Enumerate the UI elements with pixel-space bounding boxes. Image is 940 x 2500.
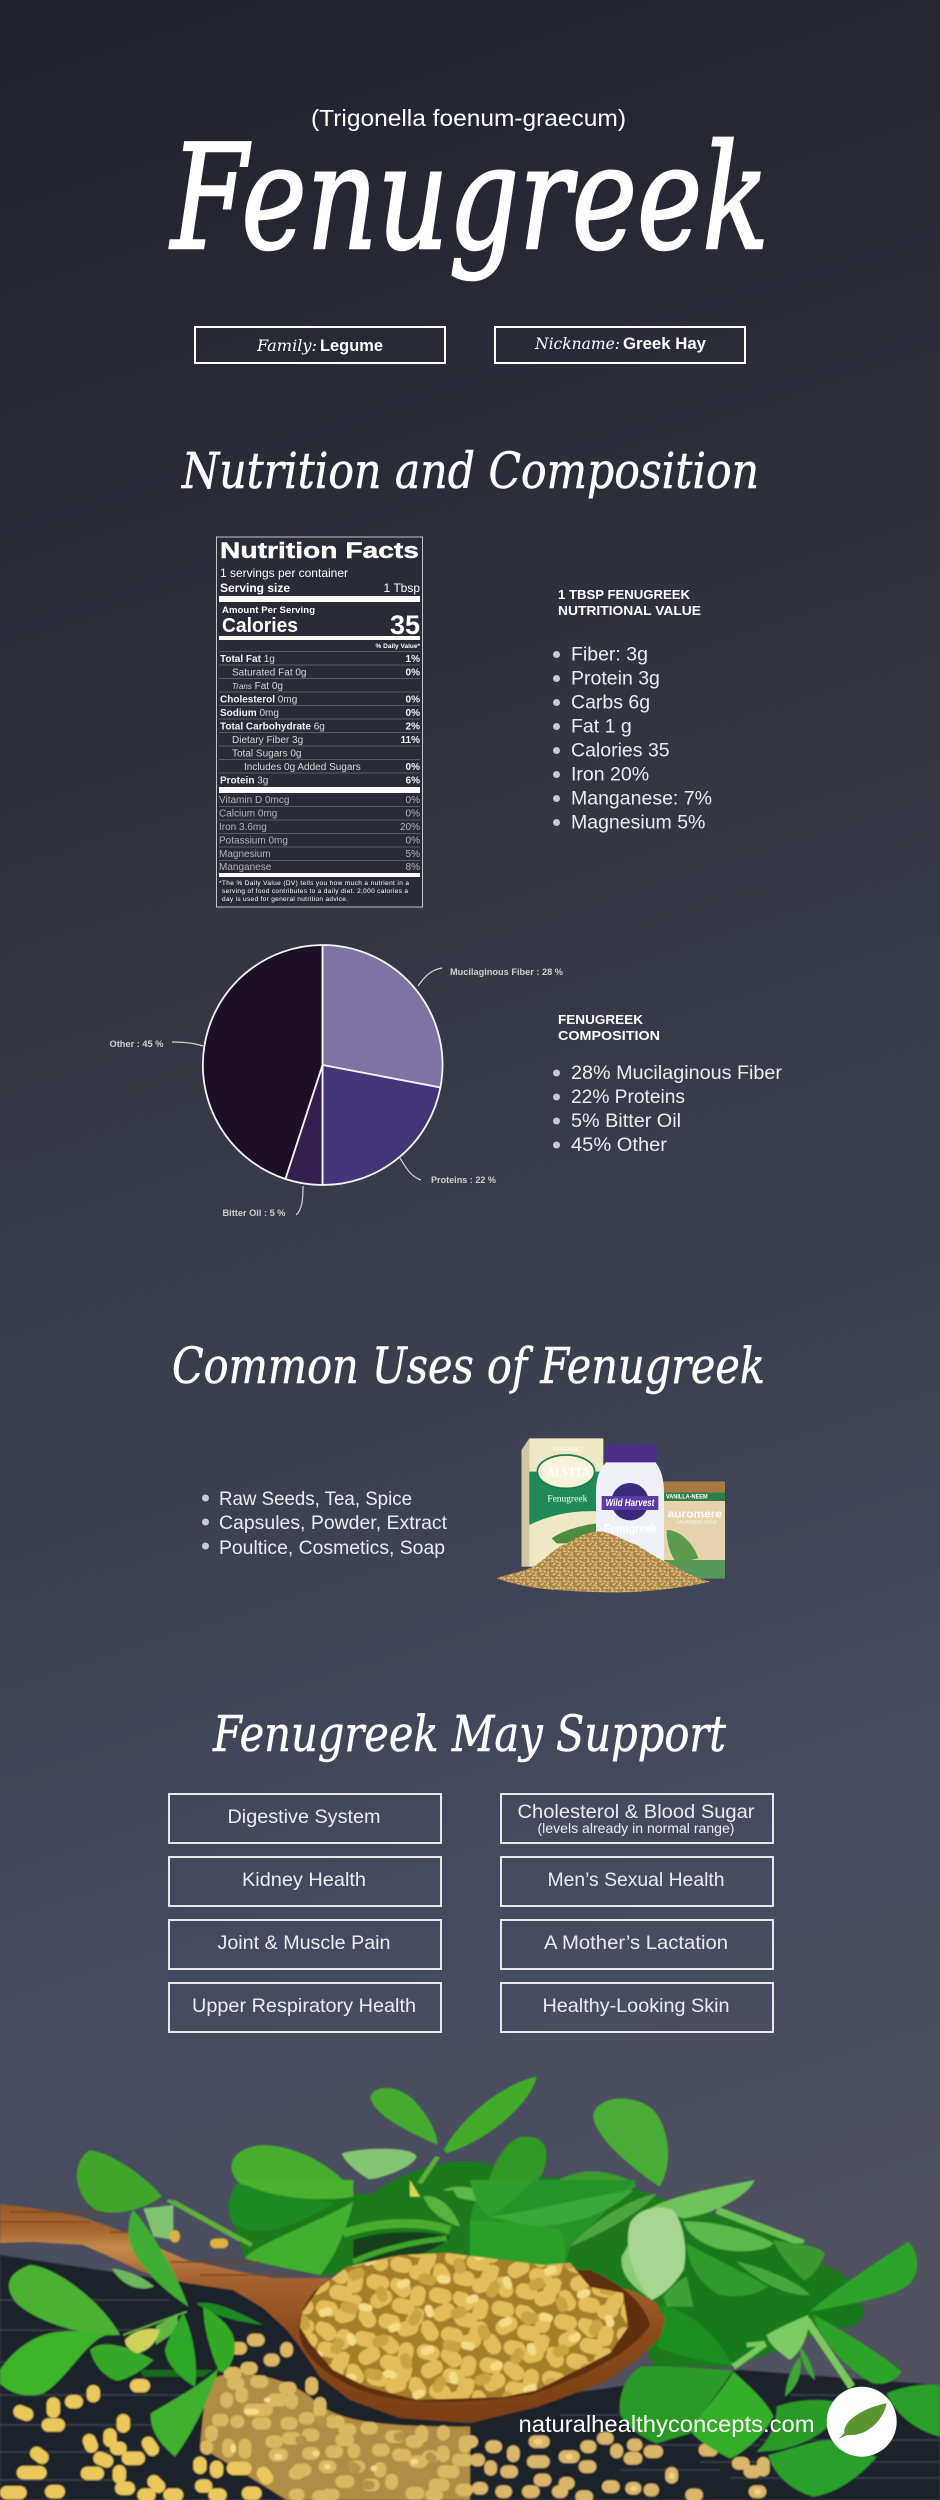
nutritional value heading: 1 TBSP FENUGREEK [558, 587, 691, 602]
badge: family: Family: [256, 336, 317, 355]
pie callout: bitter oil [222, 1186, 303, 1218]
vitamin rows: 8% [406, 862, 420, 873]
nutrient rows: Sodium 0mg [220, 708, 279, 719]
vitamin rows [219, 795, 420, 873]
calories: Calories [222, 615, 298, 637]
badge: family: Legume [320, 336, 383, 355]
front leaves left [0, 2210, 263, 2457]
vitamin rows: Magnesium [219, 849, 271, 860]
scattered seeds left [7, 2340, 470, 2500]
photo: fenugreek leaves, spoon and seeds [0, 2077, 940, 2500]
product: soap box [657, 1482, 725, 1578]
support box: a mother's lactation: A Mother’s Lactation [544, 1932, 728, 1954]
nutrient rows: Trans Fat 0g [232, 681, 283, 692]
vitamin rows: 0% [406, 808, 420, 820]
product: tea box [522, 1438, 603, 1567]
subtitle: (Trigonella foenum-graecum) [311, 105, 626, 131]
support box: men's sexual health [501, 1857, 773, 1906]
logo: leaf badge [827, 2387, 897, 2457]
nutrition facts label: 1 Tbsp [384, 581, 420, 595]
vitamin rows: Vitamin D 0mcg [219, 795, 289, 806]
composition list: 45% Other [571, 1134, 668, 1156]
nutrient rows: 0% [406, 708, 420, 719]
vitamin rows: 0% [406, 795, 420, 806]
product: tea box: Fenugreek [547, 1493, 588, 1503]
nutrient rows: Dietary Fiber 3g [232, 735, 303, 746]
spoon [0, 2204, 665, 2423]
uses list: Poultice, Cosmetics, Soap [219, 1537, 445, 1559]
uses list [206, 1488, 448, 1559]
nutrient rows: Total Carbohydrate 6g [220, 722, 325, 732]
pie callout: proteins: Proteins : 22 % [431, 1175, 496, 1185]
support box: joint and muscle pain: Joint & Muscle Pain [218, 1932, 390, 1954]
title: Fenugreek [169, 114, 769, 283]
vitamin rows: Potassium 0mg [219, 836, 288, 846]
slice: mucilaginous fiber [322, 945, 443, 1088]
seed pile [497, 1531, 710, 1592]
product: supplement bottle: Fenugreek [604, 1521, 657, 1535]
badge: nickname [495, 327, 745, 363]
product: soap box: auromere [668, 1508, 722, 1520]
nutritional value heading: NUTRITIONAL VALUE [558, 603, 701, 618]
pie callout: mucilaginous fiber: Mucilaginous Fiber : 28 % [450, 967, 563, 977]
composition list: 28% Mucilaginous Fiber [571, 1062, 783, 1084]
nutritional value list: Manganese: 7% [571, 788, 712, 810]
support box: cholesterol and blood sugar [501, 1794, 773, 1843]
support box: healthy-looking skin [501, 1983, 773, 2032]
nutrition facts label: 35 [390, 610, 420, 640]
heading: nutrition and composition: Nutrition and Composition [181, 442, 759, 500]
slice: proteins [322, 1065, 440, 1185]
nutritional value list [556, 644, 712, 834]
composition heading: FENUGREEK [558, 1012, 644, 1027]
scattered seeds right [467, 2438, 763, 2497]
nutrient rows: 2% [406, 722, 420, 732]
support box: a mother's lactation [501, 1920, 773, 1969]
icon: leaf [838, 2403, 887, 2439]
nutritional value list: Fat 1 g [571, 716, 632, 738]
vitamin rows: Calcium 0mg [219, 808, 277, 820]
seeds in spoon [300, 2253, 628, 2400]
pie chart [203, 945, 443, 1185]
support box: digestive system: Digestive System [228, 1806, 380, 1828]
product photo group [497, 1438, 725, 1592]
nutritional value heading [558, 587, 701, 618]
support box: upper respiratory health: Upper Respiratory Health [192, 1995, 416, 2017]
pie callout: proteins [400, 1158, 496, 1185]
badge: nickname: Nickname: [534, 334, 620, 353]
uses list: Capsules, Powder, Extract [219, 1512, 448, 1534]
product: soap box: AYURVEDIC SOAP [677, 1519, 717, 1524]
composition list: 5% Bitter Oil [571, 1110, 681, 1132]
support box: upper respiratory health [169, 1983, 441, 2032]
support box: kidney health [169, 1857, 441, 1906]
support box: cholesterol and blood sugar: (levels already in normal range) [538, 1820, 734, 1836]
badge: nickname: Greek Hay [623, 334, 707, 353]
nutrient rows: 1% [406, 654, 420, 665]
support box: cholesterol and blood sugar: Cholesterol & Blood Sugar [518, 1801, 755, 1823]
vitamin rows: 20% [400, 822, 420, 833]
website url: naturalhealthyconcepts.com [518, 2411, 814, 2437]
nutrition facts label: 1 servings per container [220, 566, 348, 580]
composition heading: COMPOSITION [558, 1028, 660, 1043]
badge: family [195, 327, 445, 363]
support box: kidney health: Kidney Health [242, 1869, 366, 1891]
product: supplement bottle: Wild Harvest [606, 1498, 655, 1509]
nutrient rows: 0% [406, 694, 420, 706]
front leaves right [620, 2366, 940, 2497]
support box: men's sexual health: Men’s Sexual Health [548, 1869, 724, 1891]
nutrient rows: 11% [401, 735, 420, 746]
slice: other [203, 945, 322, 1179]
heading: fenugreek may support: Fenugreek May Support [212, 1705, 727, 1763]
pie callout: other: Other : 45 % [110, 1039, 164, 1049]
nutrient rows: 0% [406, 762, 420, 773]
nutritional value list: Fiber: 3g [571, 644, 648, 666]
nutrient rows: Protein 3g [220, 776, 268, 786]
nutritional value list: Carbs 6g [571, 692, 650, 714]
vitamin rows: Iron 3.6mg [219, 822, 267, 833]
footnote: serving of food contributes to a daily diet. 2,000 calories a [222, 888, 408, 895]
nutrition facts label: Amount Per Serving [222, 605, 315, 616]
label heading: Nutrition Facts [220, 538, 419, 563]
product: supplement bottle [596, 1445, 664, 1563]
upper foliage [77, 2077, 859, 2367]
vitamin rows: 0% [406, 836, 420, 846]
product: tea box: ALVITA [547, 1466, 591, 1480]
nutritional value list: Calories 35 [571, 740, 670, 762]
footnote: *The % Daily Value (DV) tells you how much a nutrient in a [219, 880, 409, 887]
left foliage behind spoon [112, 2180, 470, 2288]
nutrient rows [220, 654, 420, 786]
nutrition facts label [216, 537, 422, 907]
product: tea box: ORGANIC [553, 1447, 582, 1453]
nutrition facts label: % Daily Value* [376, 643, 420, 650]
vitamin rows: 5% [406, 849, 420, 860]
nutrient rows: Saturated Fat 0g [232, 668, 306, 678]
nutrient rows: Total Fat 1g [220, 654, 275, 665]
footnote: day is used for general nutrition advice. [222, 896, 348, 903]
vitamin rows: Manganese [219, 862, 272, 873]
support box: joint and muscle pain [169, 1920, 441, 1969]
composition list [556, 1062, 783, 1156]
nutrient rows: Total Sugars 0g [232, 748, 302, 760]
pie callout: mucilaginous fiber [418, 967, 563, 986]
footnote [219, 880, 409, 903]
support box: healthy-looking skin: Healthy-Looking Skin [542, 1995, 730, 2017]
uses list: Raw Seeds, Tea, Spice [219, 1488, 412, 1510]
nutritional value list: Protein 3g [571, 668, 660, 690]
slice: bitter oil [285, 1065, 322, 1185]
nutritional value list: Magnesium 5% [571, 812, 705, 834]
pie callout: bitter oil: Bitter Oil : 5 % [222, 1208, 286, 1218]
wood table [0, 2255, 940, 2500]
heading: common uses: Common Uses of Fenugreek [172, 1337, 765, 1395]
composition list: 22% Proteins [571, 1086, 685, 1108]
nutrient rows: 6% [406, 776, 420, 786]
product: soap box: VANILLA-NEEM [666, 1495, 708, 1501]
nutrient rows: Includes 0g Added Sugars [244, 762, 361, 773]
nutrition facts label: Serving size [220, 581, 290, 595]
nutrient rows: Cholesterol 0mg [220, 694, 297, 706]
support box: digestive system [169, 1794, 441, 1843]
pie callout: other [110, 1039, 203, 1049]
nutrient rows: 0% [406, 668, 420, 678]
right foliage behind spoon [470, 2180, 917, 2397]
composition heading [558, 1012, 660, 1043]
nutritional value list: Iron 20% [571, 764, 649, 786]
